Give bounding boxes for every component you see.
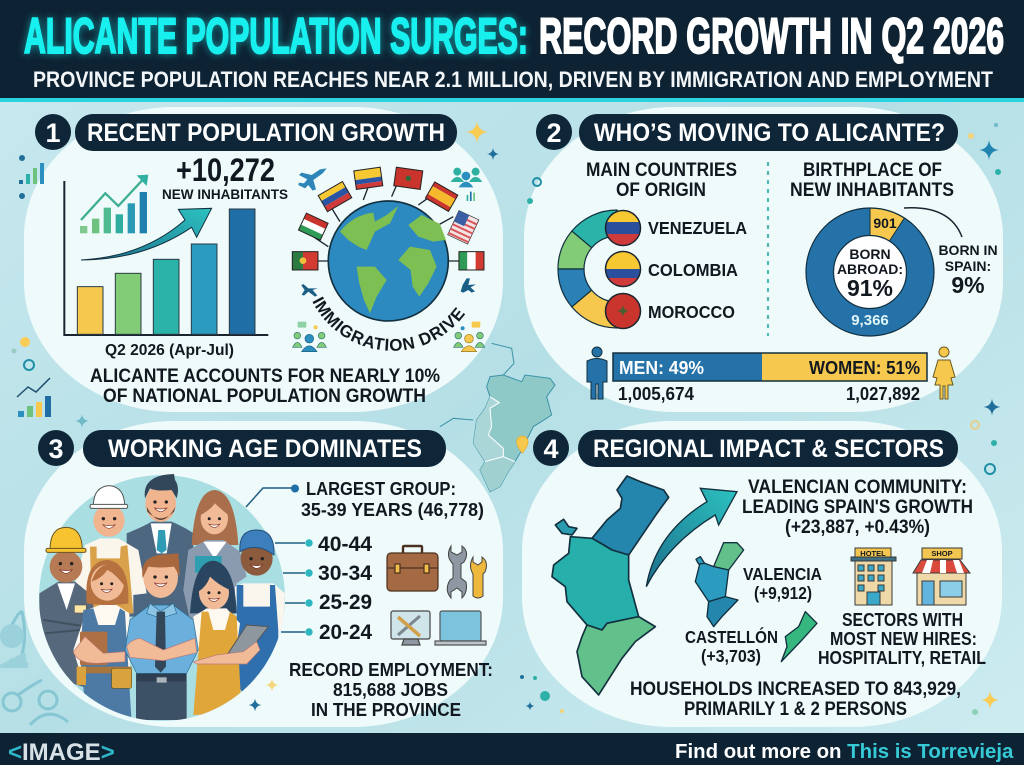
gender bar: WOMEN: 51% [809,358,920,378]
text block: sectors: SECTORS WITH [842,609,963,630]
text block: households: PRIMARILY 1 & 2 PERSONS [684,699,907,720]
age group list: 20-24 [319,621,372,644]
icon: people groups [293,168,485,352]
icon: laptop [435,611,486,645]
chart: birthplace donut: 9,366 [851,312,889,329]
flag: USA [448,211,479,244]
man in blue overalls [230,530,285,693]
heading number 1 [35,114,71,150]
text block: sectors: MOST NEW HIRES: [830,628,977,649]
panel 3: working age dominates [38,430,493,723]
age group list [275,533,372,644]
flag: Morocco [394,167,423,189]
label: new inhabitants: NEW INHABITANTS [162,186,288,202]
label: Castellón: CASTELLÓN [685,626,778,647]
text block: Valencian Community: (+23,887, +0.43%) [785,517,930,538]
icon: shop [913,548,970,605]
icon: wrenches [447,546,486,598]
text block: record employment: 815,688 JOBS [333,679,448,700]
age group list: 25-29 [319,591,372,614]
text block: Valencian Community [742,477,973,538]
text block: record employment [289,659,493,720]
label: Castellón [685,626,778,666]
icon: Colombia flag [605,251,641,287]
globe with flags [292,167,485,352]
label: Venezuela: VENEZUELA [648,218,747,238]
callout: largest group [246,479,484,520]
label: born in Spain [938,242,998,298]
label: born in Spain: SPAIN: [945,258,991,274]
central map of Alicante province [440,343,555,492]
text block: national share: ALICANTE ACCOUNTS FOR NEARLY 10% [90,366,440,387]
heading number 4: 4 [543,434,559,464]
flag: Italy-style [298,213,328,240]
curved label: immigration drive: IMMIGRATION DRIVE [312,296,466,351]
icon: location pin [517,436,528,453]
woman in grey jacket [183,490,247,620]
map: Valencia province [695,543,744,627]
footer [0,733,1024,765]
value: women: 1,027,892 [846,384,920,404]
text block: record employment: IN THE PROVINCE [311,699,461,720]
map: Castellón province [781,612,817,662]
map: Valencian Community [552,476,669,695]
arrow: growth [81,208,212,260]
heading number 1: 1 [45,118,61,148]
heading pill 1: RECENT POPULATION GROWTH [87,119,445,147]
age group list: 30-34 [318,562,372,585]
heading pill 4: REGIONAL IMPACT & SECTORS [593,435,944,463]
flag: Italy [459,252,484,270]
panel 2: who's moving to Alicante [536,114,998,404]
text block: sectors: HOSPITALITY, RETAIL [818,647,986,668]
icon: mini growth chart [80,175,148,233]
subheading: birthplace: BIRTHPLACE OF [803,160,942,181]
flag: Portugal [292,252,318,270]
title: ALICANTE POPULATION SURGES: [24,8,528,64]
subheading: countries of origin: OF ORIGIN [616,180,706,201]
text block: households: HOUSEHOLDS INCREASED TO 843,929, [630,679,961,700]
woman with clipboard right [190,561,268,715]
chart: birthplace donut: BORN [849,246,891,262]
heading pill 4 [578,430,958,467]
chart: birthplace donut: 91% [847,275,893,301]
icon: briefcase [387,546,438,591]
heading pill 3: WORKING AGE DOMINATES [108,435,422,463]
heading pill 2: WHO’S MOVING TO ALICANTE? [594,119,945,147]
subheading: birthplace [790,160,954,201]
icon: planes [298,168,476,297]
chart: birthplace donut [806,208,934,336]
text block: record employment: RECORD EMPLOYMENT: [289,659,493,680]
panel 2 background [524,107,1003,412]
icon: hotel [851,548,896,605]
woman with clipboard left [73,560,132,723]
label: born in Spain: BORN IN [938,242,998,258]
text block: households [630,679,961,720]
text block: national share: OF NATIONAL POPULATION GROWTH [103,386,426,407]
subheading: birthplace: NEW INHABITANTS [790,180,954,201]
bar chart [64,175,268,335]
callout: largest group: 35-39 YEARS (46,778) [301,500,484,520]
label: Valencia: (+9,912) [754,583,812,603]
label: Valencia [743,564,822,603]
panel 4: regional impact and sectors [533,430,986,720]
subheading: countries of origin [586,160,737,201]
label: Castellón: (+3,703) [701,646,761,666]
icon: woman [933,347,955,399]
illustration: workers group [39,474,285,723]
gender bar [613,353,927,381]
text block: sectors [818,609,986,668]
panel 1: recent population growth [35,114,486,407]
icon: hotel: HOTEL [860,549,886,558]
heading number 3 [38,430,74,466]
heading number 2 [536,114,572,150]
value: men: 1,005,674 [618,384,694,404]
label: Colombia: COLOMBIA [648,260,738,280]
panel 4 background [522,421,1002,727]
chart: birthplace donut: 901 [873,215,897,231]
heading number 2: 2 [546,118,562,148]
icon: Morocco flag [606,294,640,328]
icon: computer with tools [391,611,430,645]
hard-hat man [75,486,147,613]
arrow: regional growth [646,488,737,587]
gender bar: MEN: 49% [619,358,704,378]
flag: Venezuela [318,182,352,212]
icon: Venezuela flag [605,210,641,246]
flag: Colombia [354,167,383,189]
text block: Valencian Community: LEADING SPAIN'S GROWTH [742,497,973,518]
label: Morocco: MOROCCO [648,302,735,322]
footer: source: Find out more on This is Torrevieja [675,741,1014,763]
label: Valencia: VALENCIA [743,564,822,584]
age group list: 40-44 [318,533,372,556]
icon: man [587,347,607,399]
suit man [127,474,193,617]
chart: countries of origin ring [558,210,617,328]
axis label: Q2 2026 (Apr-Jul) [105,342,234,359]
heading number 3: 3 [48,434,64,464]
value: +10,272: +10,272 [176,152,275,188]
panel 3 background [24,421,503,727]
decorations: background icons [0,121,1001,725]
icon: shop: SHOP [931,549,953,558]
chart: birthplace donut: ABROAD: [837,261,903,277]
central man [125,553,198,720]
flag: Spain [425,182,458,211]
text block: national share [90,366,440,407]
yellow-hat man [39,527,93,690]
panel 1 background [24,107,503,412]
label: born in Spain: 9% [951,272,985,298]
subheading: countries of origin: MAIN COUNTRIES [586,160,737,181]
heading number 4 [533,430,569,466]
header banner [0,0,1024,102]
callout: largest group: LARGEST GROUP: [306,479,456,499]
text block: Valencian Community: VALENCIAN COMMUNITY: [748,477,967,498]
